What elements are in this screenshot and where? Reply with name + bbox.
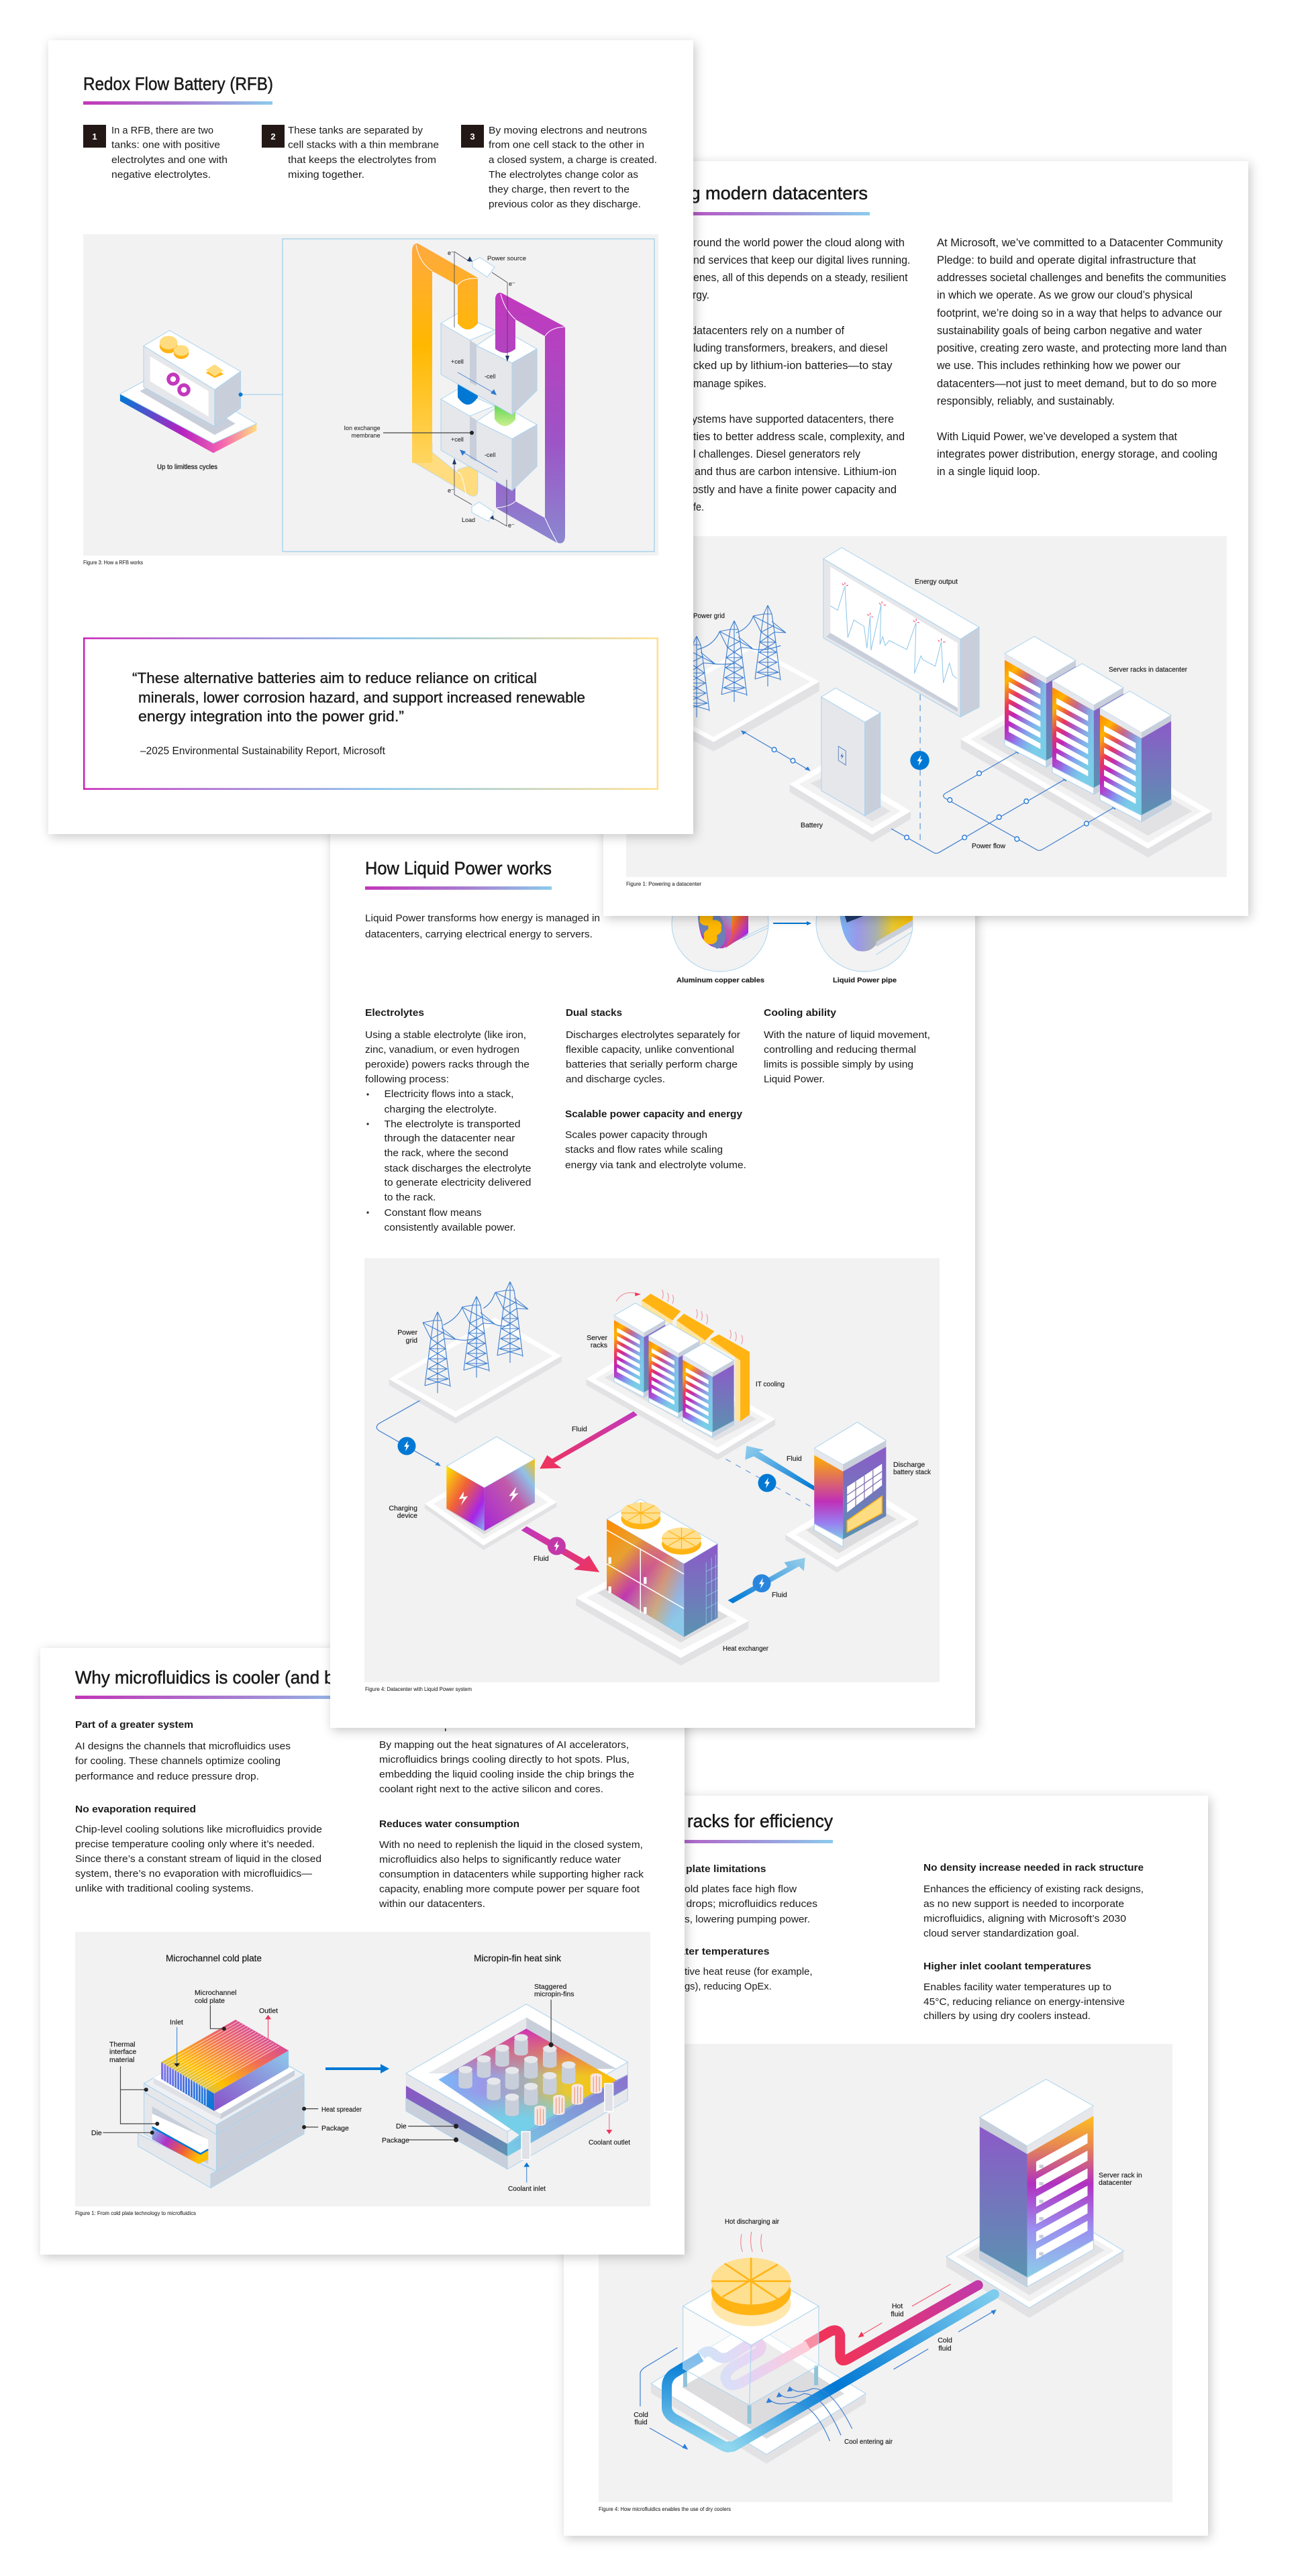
labels: liquid power figure: IT cooling bbox=[756, 1380, 785, 1388]
labels: RFB schematic: e⁻ bbox=[509, 280, 515, 287]
text column: electrolytes: Using a stable electrolyte (like iron, bbox=[365, 1029, 526, 1041]
text column: electrolytes bbox=[365, 1007, 532, 1233]
text column: cooling ability: Liquid Power. bbox=[764, 1074, 825, 1085]
step 2: that keeps the electrolytes from bbox=[288, 154, 436, 166]
labels: liquid power figure: grid bbox=[405, 1337, 417, 1345]
heading: racks for efficiency bbox=[599, 1811, 833, 1843]
text column: cold plate and outlet temperatures: and very high pressure bbox=[599, 1898, 686, 1910]
caption: figure 1: Figure 1: Powering a datacenter bbox=[626, 880, 701, 887]
labels: liquid power figure: Charging bbox=[389, 1504, 417, 1512]
text column: greater system and evaporation: performance and reduce pressure drop. bbox=[75, 1771, 259, 1782]
illustration: microchannel cold plate bbox=[103, 2005, 318, 2188]
text column: greater system and evaporation: AI designs the channels that microfluidics uses bbox=[75, 1741, 291, 1752]
text column: datacenter background: ties to better address scale, complexity, and bbox=[693, 431, 905, 443]
page: optimizing racks for efficiency bbox=[564, 1796, 1208, 2536]
illustration: aluminum copper cables vs liquid power pipe bbox=[672, 875, 913, 972]
arrow: cold plate to microfluidics bbox=[325, 2064, 389, 2073]
text column: greater system and evaporation: system, there’s no evaporation with microfluidics— bbox=[75, 1868, 312, 1879]
heading: racks for efficiency: Optimizing bbox=[599, 1811, 687, 1831]
heading: powering modern datacenters bbox=[625, 183, 870, 215]
step 3: previous color as they discharge. bbox=[489, 199, 641, 210]
labels: cold plate and heat sink: Die bbox=[396, 2122, 407, 2130]
text column: datacenter background: While these s bbox=[625, 413, 692, 425]
labels: datacenter figure bbox=[693, 578, 1187, 850]
text column: cooling ability bbox=[764, 1007, 930, 1085]
text column: dual stacks and scalable capacity bbox=[565, 1007, 746, 1171]
text column: datacenter background: online and bbox=[625, 378, 693, 390]
labels: dry cooler figure: Cool entering air bbox=[844, 2438, 893, 2446]
text column: rack structure and inlet temperatures bbox=[923, 1862, 1144, 2022]
labels: cold plate and heat sink: cold plate bbox=[195, 1997, 225, 2005]
racks: server racks in datacenter bbox=[1005, 636, 1171, 822]
page: redox flow battery bbox=[48, 40, 693, 834]
labels: dry cooler figure: fluid bbox=[891, 2310, 904, 2318]
text column: datacenter background: ostly and have a finite power capacity and bbox=[692, 484, 897, 496]
intro paragraph: datacenters, carrying electrical energy to servers. bbox=[365, 929, 593, 940]
labels: liquid power figure: Power bbox=[397, 1329, 417, 1337]
text column: dual stacks and scalable capacity: and discharge cycles. bbox=[566, 1074, 665, 1085]
text column: electrolytes: to generate electricity delivered bbox=[384, 1177, 532, 1188]
text column: datacenter background: supply of ene bbox=[625, 289, 693, 301]
labels: dry cooler figure: Cold bbox=[938, 2336, 952, 2345]
text column: cold plate and outlet temperatures: ter temperatures bbox=[685, 1946, 769, 1957]
text column: cooling ability: limits is possible simply by using bbox=[764, 1059, 913, 1070]
text column: electrolytes: the rack, where the second bbox=[384, 1147, 509, 1159]
text column: cooling ability: With the nature of liquid movement, bbox=[764, 1029, 930, 1041]
text column: cold plate and outlet temperatures: gs), reducing OpEx. bbox=[685, 1981, 772, 1992]
text column: hot spots and water consumption bbox=[379, 1729, 644, 1910]
illustration: platforms, battery, display and power flow bbox=[644, 548, 1212, 858]
text column: hot spots and water consumption: consumption in datacenters while supporting higher rack bbox=[379, 1869, 644, 1880]
step 2 bbox=[262, 125, 439, 181]
text column: electrolytes: through the datacenter near bbox=[384, 1133, 515, 1144]
labels: datacenter figure: Server racks in datacenter bbox=[1109, 666, 1187, 674]
quote callout: –2025 Environmental Sustainability Report, Microsoft bbox=[140, 745, 386, 757]
text column: rack structure and inlet temperatures: Higher inlet coolant temperatures bbox=[923, 1961, 1091, 1972]
text column: electrolytes: Electrolytes bbox=[365, 1007, 424, 1019]
page: why microfluidics is cooler bbox=[40, 1648, 685, 2255]
text column: greater system and evaporation: No evaporation required bbox=[75, 1804, 196, 1815]
labels: RFB schematic: e⁻ bbox=[508, 522, 515, 529]
text column: greater system and evaporation: Chip-level cooling solutions like microfluidics provide bbox=[75, 1824, 322, 1835]
text column: cold plate and outlet temperatures: old plates face high flow bbox=[685, 1884, 797, 1895]
text column: hot spots and water consumption: By mapping out the heat signatures of AI accelerators, bbox=[379, 1739, 629, 1751]
step 3: they charge, then revert to the bbox=[489, 184, 630, 195]
text column: dual stacks and scalable capacity: flexible capacity, unlike conventional bbox=[566, 1044, 734, 1055]
text column: dual stacks and scalable capacity: Scales power capacity through bbox=[565, 1129, 707, 1141]
labels: liquid power figure: Fluid bbox=[772, 1591, 787, 1599]
figure background: how a RFB works bbox=[83, 234, 658, 556]
labels: RFB schematic: Power source bbox=[487, 255, 526, 262]
text column: electrolytes: to the rack. bbox=[384, 1192, 436, 1203]
step 2: 2 bbox=[270, 132, 276, 142]
step 2: cell stacks with a thin membrane bbox=[288, 140, 439, 150]
text column: datacenter background: Behind the sc bbox=[625, 272, 693, 284]
heading: how liquid power works bbox=[365, 858, 552, 890]
labels: dry cooler figure: Cold bbox=[634, 2411, 648, 2419]
labels: dry cooler figure: Server rack in bbox=[1099, 2171, 1142, 2179]
labels: cables and pipe: Aluminum copper cables bbox=[676, 976, 764, 984]
labels: cold plate and heat sink: Coolant outlet bbox=[589, 2139, 630, 2147]
text column: cold plate and outlet temperatures: Overcoming cold bbox=[599, 1863, 686, 1875]
labels: dry cooler figure: datacenter bbox=[1099, 2179, 1132, 2187]
towers: power grid bbox=[423, 1282, 528, 1393]
text column: dual stacks and scalable capacity: Dual stacks bbox=[566, 1007, 622, 1019]
towers: power grid bbox=[682, 605, 786, 717]
heading: redox flow battery bbox=[83, 74, 273, 105]
text column: community pledge and liquid power: footprint, we’re doing so in a way that helps to advance our bbox=[937, 307, 1222, 319]
step 3 bbox=[461, 125, 657, 210]
text column: greater system and evaporation bbox=[75, 1719, 322, 1894]
labels: RFB schematic: Up to limitless cycles bbox=[157, 463, 217, 471]
labels: RFB schematic: e⁻ bbox=[448, 487, 454, 494]
heading: why microfluidics bbox=[75, 1667, 374, 1699]
labels: dry cooler figure: Hot bbox=[892, 2302, 903, 2310]
heading: powering modern datacenters: Powering bbox=[625, 183, 705, 203]
labels: dry cooler figure: fluid bbox=[634, 2418, 648, 2426]
step 2: These tanks are separated by bbox=[288, 125, 423, 136]
text column: dual stacks and scalable capacity: energy via tank and electrolyte volume. bbox=[565, 1160, 746, 1171]
illustration: liquid power system platforms and arrows bbox=[376, 1290, 918, 1665]
text column: community pledge and liquid power: in a single liquid loop. bbox=[937, 466, 1040, 478]
text column: community pledge and liquid power: With Liquid Power, we’ve developed a system that bbox=[937, 431, 1177, 443]
text column: hot spots and water consumption: microfluidics also helps to significantly reduce water bbox=[379, 1854, 621, 1865]
labels: liquid power figure: battery stack bbox=[893, 1468, 932, 1476]
caption: figure 3: Figure 3: How a RFB works bbox=[83, 559, 143, 566]
intro paragraph: Liquid Power transforms how energy is managed in bbox=[365, 913, 600, 924]
text column: datacenter background: ystems have supported datacenters, there bbox=[692, 413, 894, 425]
text column: hot spots and water consumption: within our datacenters. bbox=[379, 1898, 485, 1910]
labels: cold plate and heat sink: Package bbox=[321, 2124, 349, 2132]
labels: RFB schematic: e⁻ bbox=[448, 250, 454, 256]
text column: community pledge and liquid power: we use. This includes rethinking how we power our bbox=[936, 360, 1181, 372]
labels: cold plate and heat sink: material bbox=[109, 2056, 134, 2064]
step 1 bbox=[83, 125, 228, 181]
text column: electrolytes: charging the electrolyte. bbox=[384, 1104, 497, 1115]
text column: rack structure and inlet temperatures: cloud server standardization goal. bbox=[923, 1928, 1079, 1939]
text column: datacenter background: fe. bbox=[693, 501, 704, 513]
illustration: server rack connected to dry cooler bbox=[640, 2079, 1123, 2464]
text column: datacenter background: Today’s bbox=[625, 325, 691, 337]
text column: cold plate and outlet temperatures: s, lowering pumping power. bbox=[685, 1914, 810, 1925]
text column: electrolytes: peroxide) powers racks through the bbox=[365, 1059, 530, 1070]
text column: rack structure and inlet temperatures: Enables facility water temperatures up to bbox=[923, 1981, 1111, 1993]
step 3: a closed system, a charge is created. bbox=[489, 154, 657, 166]
labels: liquid power figure: device bbox=[397, 1512, 417, 1520]
text column: greater system and evaporation: Part of a greater system bbox=[75, 1719, 193, 1731]
icon: power badge bbox=[910, 751, 930, 770]
labels: cold plate and heat sink: micropin-fins bbox=[534, 1990, 574, 1998]
text column: hot spots and water consumption: capacity, enabling more compute power per square foot bbox=[379, 1884, 640, 1895]
labels: liquid power figure: Fluid bbox=[787, 1455, 802, 1463]
step 2: mixing together. bbox=[288, 169, 364, 181]
labels: RFB schematic bbox=[157, 250, 526, 529]
text column: greater system and evaporation: Since there’s a constant stream of liquid in the closed bbox=[75, 1853, 321, 1865]
labels: cold plate and heat sink: Outlet bbox=[259, 2007, 278, 2015]
icon: infinity symbol bbox=[168, 374, 189, 395]
labels: cables and pipe bbox=[676, 976, 897, 984]
text column: greater system and evaporation: precise temperature cooling only where it’s needed. bbox=[75, 1839, 315, 1850]
step 1: In a RFB, there are two bbox=[111, 125, 213, 136]
labels: dry cooler figure bbox=[634, 2171, 1142, 2446]
text column: electrolytes: stack discharges the electrolyte bbox=[384, 1163, 532, 1174]
text column: hot spots and water consumption: With no need to replenish the liquid in the closed system, bbox=[379, 1839, 643, 1851]
text column: electrolytes: consistently available power. bbox=[384, 1222, 515, 1233]
step 1: 1 bbox=[92, 132, 97, 142]
text column: community pledge and liquid power: At Microsoft, we’ve committed to a Datacenter Community bbox=[937, 237, 1223, 249]
text column: electrolytes: The electrolyte is transported bbox=[384, 1119, 521, 1130]
labels: liquid power figure: Discharge bbox=[893, 1461, 925, 1469]
labels: cold plate and heat sink: Inlet bbox=[170, 2018, 183, 2026]
text column: datacenter background: batteries are c bbox=[625, 484, 692, 496]
quote callout: minerals, lower corrosion hazard, and support increased renewable bbox=[138, 689, 585, 706]
caption: figure 1 cold plate: Figure 1: From cold plate technology to microfluidics bbox=[75, 2210, 196, 2216]
labels: liquid power figure bbox=[389, 1329, 932, 1653]
text column: community pledge and liquid power: addresses societal challenges and benefits the communities bbox=[937, 272, 1226, 284]
text column: dual stacks and scalable capacity: Discharges electrolytes separately for bbox=[566, 1029, 740, 1041]
text column: rack structure and inlet temperatures: Enhances the efficiency of existing rack designs, bbox=[923, 1884, 1144, 1895]
text column: community pledge and liquid power: in which we operate. As we grow our cloud’s physical bbox=[937, 289, 1193, 301]
figure background: cold plate to microfluidics bbox=[75, 1932, 650, 2206]
text column: datacenter background: cked up by lithium-ion batteries—to stay bbox=[693, 360, 893, 372]
text column: electrolytes: Electricity flows into a stack, bbox=[384, 1088, 514, 1100]
text column: datacenter background: generators ba bbox=[625, 360, 694, 372]
text column: community pledge and liquid power: Pledge: to build and operate digital infrastructure that bbox=[937, 254, 1196, 266]
text column: community pledge and liquid power: datacenters—not just to meet demand, but to do so more bbox=[937, 378, 1217, 390]
illustration: micropin-fin heat sink bbox=[406, 2000, 627, 2183]
text column: community pledge and liquid power: positive, creating zero waste, and protecting more land than bbox=[937, 342, 1227, 354]
text column: datacenter background: are opportuni bbox=[625, 431, 693, 443]
heading: how liquid power works: How Liquid Power works bbox=[365, 858, 552, 878]
labels: cold plate and heat sink: Microchannel cold plate bbox=[166, 1953, 262, 1963]
figure background: dry cooler bbox=[599, 2044, 1172, 2502]
figure background: liquid power system bbox=[364, 1258, 940, 1682]
labels: cold plate and heat sink: Coolant inlet bbox=[508, 2185, 546, 2193]
text column: cold plate and outlet temperatures: Traditional channel c bbox=[599, 1884, 685, 1895]
text column: rack structure and inlet temperatures: as no new support is needed to incorporate bbox=[923, 1898, 1124, 1910]
icons: power and flow badges bbox=[397, 1437, 776, 1592]
text column: dual stacks and scalable capacity: stacks and flow rates while scaling bbox=[565, 1144, 723, 1155]
illustration: battery with limitless cycles bbox=[120, 330, 256, 453]
labels: RFB schematic: +cell bbox=[451, 436, 464, 443]
labels: dry cooler figure: fluid bbox=[938, 2345, 952, 2353]
text column: datacenter background: datacenters rely on a number of bbox=[691, 325, 844, 337]
text column: greater system and evaporation: unlike with traditional cooling systems. bbox=[75, 1883, 254, 1894]
text column: community pledge and liquid power: responsibly, reliably, and sustainably. bbox=[937, 395, 1115, 407]
labels: cold plate and heat sink: Staggered bbox=[534, 1983, 567, 1991]
caption: figure 4 dry coolers: Figure 4: How microfluidics enables the use of dry coolers bbox=[599, 2506, 731, 2512]
text column: cold plate and outlet temperatures: tive heat reuse (for example, bbox=[685, 1966, 813, 1977]
text column: community pledge and liquid power: sustainability goals of being carbon negative and water bbox=[937, 325, 1202, 337]
labels: RFB schematic: membrane bbox=[351, 432, 380, 439]
text column: datacenter background: components—inc bbox=[625, 342, 693, 354]
text column: datacenter background: rgy. bbox=[693, 289, 709, 301]
text column: datacenter background: applications a bbox=[625, 254, 694, 266]
text column: cold plate and outlet temperatures: Enables more effec bbox=[599, 1966, 685, 1977]
text column: community pledge and liquid power bbox=[936, 237, 1227, 478]
heading: redox flow battery: Redox Flow Battery (RFB) bbox=[83, 74, 273, 94]
text column: hot spots and water consumption: coolant right next to the active silicon and cores. bbox=[379, 1784, 603, 1795]
page: how liquid power works bbox=[330, 825, 975, 1728]
text column: cold plate and outlet temperatures: for heating buildin bbox=[599, 1981, 685, 1992]
labels: datacenter figure: Power grid bbox=[693, 612, 725, 620]
text column: rack structure and inlet temperatures: 45°C, reducing reliance on energy-intensive bbox=[923, 1996, 1125, 2008]
heading: racks for efficiency: racks for efficiency bbox=[687, 1811, 833, 1831]
connector: battery to detail box bbox=[239, 393, 283, 397]
text column: datacenter background: nd services that keep our digital lives running. bbox=[693, 254, 910, 266]
labels: datacenter figure: Energy output bbox=[915, 578, 958, 586]
text column: hot spots and water consumption: embedding the liquid cooling inside the chip brings the bbox=[379, 1769, 634, 1780]
labels: liquid power figure: Fluid bbox=[534, 1555, 549, 1563]
arrow: cables to pipe bbox=[773, 921, 811, 925]
text column: cold plate and outlet temperatures: drops; microfluidics reduces bbox=[686, 1898, 817, 1910]
text column: datacenter background: manage spikes. bbox=[693, 378, 766, 390]
text column: electrolytes: zinc, vanadium, or even hydrogen bbox=[365, 1044, 519, 1055]
text column: datacenter background: luding transformers, breakers, and diesel bbox=[693, 342, 888, 354]
step 3: 3 bbox=[470, 132, 475, 142]
labels: cold plate and heat sink: interface bbox=[109, 2048, 136, 2056]
heading: why microfluidics: Why microfluidics is cooler (and better) bbox=[75, 1667, 374, 1688]
text column: electrolytes: Constant flow means bbox=[384, 1207, 482, 1219]
labels: cold plate and heat sink: Microchannel bbox=[195, 1989, 236, 1997]
text column: datacenter background: round the world power the cloud along with bbox=[693, 237, 905, 249]
quote callout: energy integration into the power grid.” bbox=[138, 708, 404, 725]
figure background: powering a datacenter bbox=[626, 536, 1227, 877]
text column: greater system and evaporation: for cooling. These channels optimize cooling bbox=[75, 1755, 281, 1767]
labels: liquid power figure: racks bbox=[591, 1341, 607, 1349]
text column: datacenter background: and thus are carbon intensive. Lithium-ion bbox=[695, 466, 897, 478]
step 1: negative electrolytes. bbox=[111, 169, 211, 181]
labels: RFB schematic: -cell bbox=[485, 373, 496, 380]
text column: cold plate and outlet temperatures: both of these losse bbox=[599, 1914, 685, 1925]
page: powering modern datacenters bbox=[603, 161, 1248, 916]
text column: datacenter background: environmenta bbox=[625, 448, 694, 460]
step 3: By moving electrons and neutrons bbox=[489, 125, 647, 136]
labels: cold plate and heat sink: Micropin-fin heat sink bbox=[474, 1953, 562, 1963]
labels: cold plate and heat sink bbox=[91, 1953, 630, 2193]
text column: datacenter background: enes, all of this depends on a steady, resilient bbox=[693, 272, 908, 284]
quote callout: “These alternative batteries aim to reduce reliance on critical bbox=[132, 670, 537, 686]
text column: datacenter background: l challenges. Diesel generators rely bbox=[693, 448, 861, 460]
intro paragraph bbox=[365, 913, 600, 940]
labels: RFB schematic: Ion exchange bbox=[344, 425, 380, 431]
text column: cold plate and outlet temperatures: plate limitations bbox=[686, 1863, 766, 1875]
labels: liquid power figure: Heat exchanger bbox=[723, 1645, 768, 1653]
step 3: The electrolytes change color as bbox=[489, 169, 638, 181]
text column: datacenter background: limited shelf li bbox=[625, 501, 693, 513]
text column: hot spots and water consumption: microfluidics brings cooling directly to hot spots. Plus, bbox=[379, 1754, 630, 1765]
labels: datacenter figure: Battery bbox=[801, 821, 823, 829]
detail box: RFB schematic bbox=[283, 239, 654, 552]
text column: dual stacks and scalable capacity: batteries that serially perform charge bbox=[566, 1059, 738, 1070]
labels: cold plate and heat sink: Heat spreader bbox=[321, 2106, 362, 2114]
text column: community pledge and liquid power: integrates power distribution, energy storage, and cooling bbox=[937, 448, 1217, 460]
labels: RFB schematic: -cell bbox=[485, 452, 496, 458]
text column: rack structure and inlet temperatures: chillers by using dry coolers instead. bbox=[923, 2010, 1091, 2022]
racks: server racks with IT cooling bbox=[614, 1303, 734, 1437]
text column: cold plate and outlet temperatures: Higher outlet wa bbox=[599, 1946, 686, 1957]
text column: cooling ability: controlling and reducing thermal bbox=[764, 1044, 916, 1055]
text column: rack structure and inlet temperatures: microfluidics, aligning with Microsoft’s 2030 bbox=[923, 1913, 1126, 1924]
labels: dry cooler figure: Hot discharging air bbox=[725, 2218, 779, 2226]
text column: rack structure and inlet temperatures: No density increase needed in rack structure bbox=[923, 1862, 1144, 1873]
step 3: from one cell stack to the other in bbox=[489, 140, 644, 150]
text column: datacenter background: on fossil fuels bbox=[625, 466, 695, 478]
text column: dual stacks and scalable capacity: Scalable power capacity and energy bbox=[565, 1109, 743, 1120]
labels: datacenter figure: Power flow bbox=[972, 842, 1005, 850]
step 1: electrolytes and one with bbox=[111, 154, 228, 166]
labels: cold plate and heat sink: Package bbox=[382, 2136, 409, 2145]
labels: RFB schematic: +cell bbox=[451, 358, 464, 365]
text column: hot spots and water consumption: Reduces water consumption bbox=[379, 1818, 519, 1830]
labels: cold plate and heat sink: Thermal bbox=[109, 2041, 136, 2049]
text column: datacenter background bbox=[625, 237, 910, 513]
labels: cold plate and heat sink: Die bbox=[91, 2129, 102, 2137]
text column: cold plate and outlet temperatures bbox=[599, 1863, 817, 1992]
text column: datacenter background: Datacenters a bbox=[625, 237, 694, 249]
text column: electrolytes: following process: bbox=[365, 1074, 449, 1085]
labels: liquid power figure: Fluid bbox=[572, 1425, 587, 1433]
text column: cooling ability: Cooling ability bbox=[764, 1007, 837, 1019]
labels: RFB schematic: Load bbox=[462, 517, 475, 523]
labels: liquid power figure: Server bbox=[587, 1334, 607, 1342]
labels: cables and pipe: Liquid Power pipe bbox=[833, 976, 897, 984]
step 1: tanks: one with positive bbox=[111, 140, 220, 150]
quote callout bbox=[84, 638, 658, 789]
caption: figure 4 liquid power: Figure 4: Datacenter with Liquid Power system bbox=[365, 1686, 472, 1692]
heading: powering modern datacenters: modern datacenters bbox=[705, 183, 868, 203]
